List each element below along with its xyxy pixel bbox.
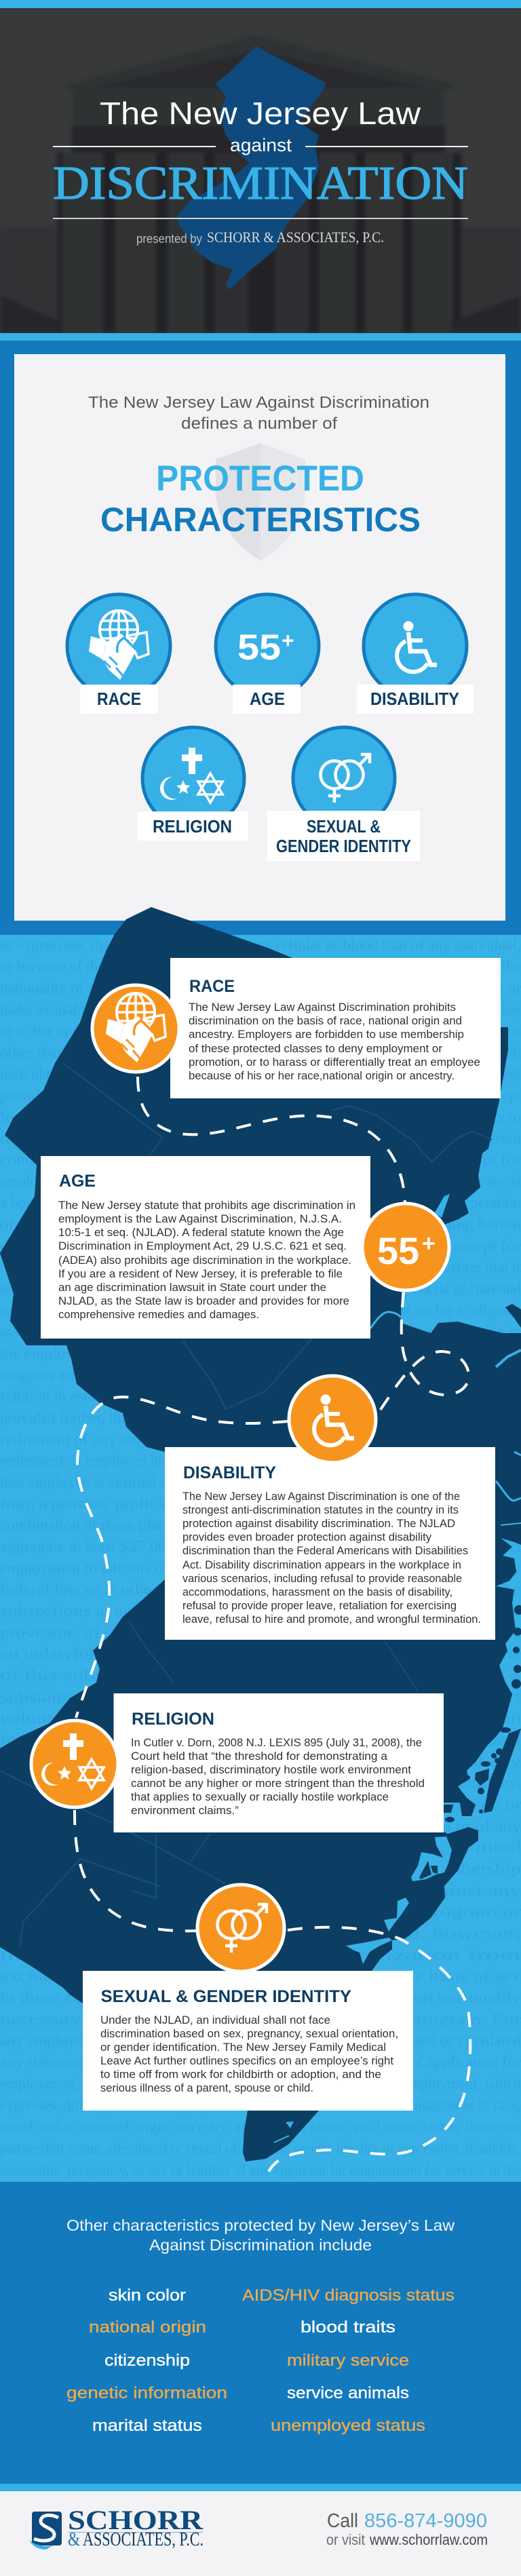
statute text pattern: to use club membership as a uniform qualification for employment, or for a religious <box>0 1302 521 1319</box>
card: disability: strongest anti-discrimination statutes in the country in its <box>182 1503 459 1516</box>
logo: SCHORR <box>68 2505 204 2535</box>
statute text pattern: subsections a. and b. of this section shall be read together with the <box>0 1602 521 1619</box>
list right column: service animals <box>287 2384 409 2402</box>
list left column <box>66 2286 227 2435</box>
statute text pattern: that employee is entitled to an immediate nonforfeitable annual retirement benefit <box>0 1474 521 1491</box>
list left column: citizenship <box>104 2351 190 2370</box>
list left column: genetic information <box>66 2384 227 2402</box>
badge: age <box>216 594 319 714</box>
statute text pattern: report for active duty in the armed forces; provided further that nothing herein <box>0 1130 521 1147</box>
statute text pattern: individual who served in the Armed Forces of the United <box>0 1839 521 1856</box>
card: age <box>41 1156 370 1339</box>
title: The New Jersey Law <box>100 96 421 131</box>
card: religion: environment claims.” <box>131 1804 239 1817</box>
panel: map background <box>0 935 521 2182</box>
New Jersey silhouette <box>176 46 326 290</box>
heading: protected characteristics: PROTECTED <box>156 459 364 499</box>
card: religion: religion-based, discriminatory hostile work environment <box>131 1763 411 1776</box>
statute text pattern: aggregate at least $27,000; and provided further that an employer may restrict <box>0 1538 521 1555</box>
list right column: military service <box>287 2351 409 2370</box>
statute text pattern: employment or to promote any person over 70 years of age; provided further that it <box>0 1258 521 1275</box>
badge: disability <box>357 594 474 714</box>
intro <box>66 2216 455 2254</box>
title: DISCRIMINATION <box>53 157 468 210</box>
contact <box>326 2510 488 2548</box>
card: sexual and gender identity: Under the NJLAD, an individual shall not face <box>100 2014 330 2026</box>
header section <box>0 0 521 341</box>
icon: age circle: + <box>422 1231 436 1256</box>
badge: disability: DISABILITY <box>370 689 459 709</box>
statute text pattern: any statement, advertisement or publication, or to use any form of application for <box>0 2054 521 2071</box>
card: race: ancestry. Employers are forbidden to use membership <box>189 1028 464 1041</box>
card: disability: The New Jersey Law Against Discrimination is one of the <box>182 1490 460 1503</box>
map: New Jersey <box>0 907 521 2161</box>
statute text pattern: of the particular business or enterprise; provided further that nothing herein <box>0 1216 521 1233</box>
card: race: RACE <box>189 977 235 996</box>
card: age: comprehensive remedies and damages. <box>58 1308 259 1321</box>
card: age: If you are a resident of New Jersey, it is preferable to file <box>58 1267 343 1280</box>
badge: age: 55 <box>237 628 281 668</box>
card: age: (ADEA) also prohibits age discrimination in the workplace. <box>58 1254 351 1267</box>
statute text pattern: States, or to refuse to hire or to deny full and equal membership <box>0 1860 521 1877</box>
statute text pattern: federal law or is otherwise necessary to protect the national interest. The <box>0 1581 521 1598</box>
card: religion: In Cutler v. Dorn, 2008 N.J. LEXIS 895 (July 31, 2008), the <box>131 1736 422 1749</box>
card: sexual and gender identity: discrimination based on sex, pregnancy, sexual orientation, <box>100 2027 398 2040</box>
list left column: skin color <box>109 2286 186 2305</box>
card: age: NJLAD, as the State law is broader and provides for more <box>58 1294 349 1307</box>
statute text pattern: other than age, from employment such individual or to discriminate against such <box>0 1044 521 1061</box>
card: age: The New Jersey statute that prohibits age discrimination in <box>58 1199 355 1212</box>
badge: age: AGE <box>250 689 285 709</box>
logo: ASSOCIATES, P.C. <box>83 2529 204 2550</box>
badge: religion: RELIGION <box>153 816 232 837</box>
statute text pattern: from a pension, profit sharing, savings or deferred retirement plan, or any <box>0 1495 521 1512</box>
card: disability: Act. Disability discrimination appears in the workplace in <box>182 1558 461 1571</box>
statute text pattern: or to limit the admission to, or employment in, any such program or <box>0 1796 521 1813</box>
statute text pattern: retirement of any employee who, for the two-year period immediately before <box>0 1431 521 1448</box>
statute text pattern: make available the results of a genetic test to an employer, to refuse to hire or employ <box>0 1001 521 1018</box>
icon: age circle: 55 <box>377 1229 419 1272</box>
statute text pattern: any employer or employment agency to print or cause to be printed or circulated <box>0 2032 521 2049</box>
statute text pattern: excluding from employment any person solely on the basis of sex <box>0 1967 521 1984</box>
card: age: AGE <box>59 1172 96 1191</box>
statute text pattern: necessary to the normal operation of the training program. For <box>0 2011 521 2028</box>
icon: disability circle <box>289 1376 376 1463</box>
intro: Against Discrimination include <box>149 2236 372 2254</box>
card: disability: provides even broader protection against disability <box>182 1531 431 1543</box>
badge: race: RACE <box>97 689 141 709</box>
card: race: The New Jersey Law Against Discrimination prohibits <box>189 1001 456 1014</box>
statute text pattern: contained shall be construed to bar an employer from refusing to accept for <box>0 1151 521 1168</box>
card: race: promotion, or to harass or differentially treat an employee <box>189 1056 480 1069</box>
card: disability: DISABILITY <box>183 1463 276 1482</box>
list right column: blood traits <box>301 2318 395 2337</box>
card: race: of these protected classes to deny employment or <box>189 1042 442 1055</box>
list right column: AIDS/HIV diagnosis status <box>242 2286 455 2305</box>
card: age: an age discrimination lawsuit in State court under the <box>58 1281 326 1294</box>
dashed route <box>75 1077 470 2174</box>
statute text pattern: on the job and related instruction; provided, however, <box>0 1925 521 1942</box>
card: sexual and gender identity: serious illness of a parent, spouse or child. <box>100 2081 313 2094</box>
card: disability: accommodations, harassment on the basis of disability, <box>182 1585 452 1598</box>
statute text pattern: religion in establishing and utilizing criteria for employment of an employee; and <box>0 1387 521 1404</box>
title <box>53 96 468 219</box>
intro text: The New Jersey Law Against Discrimination <box>88 393 429 412</box>
footer <box>29 2505 488 2550</box>
statute text pattern: individual, to exclude or to expel from its membership such individual any, <box>0 1774 521 1791</box>
badge: sexual and gender identity <box>267 727 420 861</box>
icon: religion circle <box>31 1720 118 1807</box>
intro text <box>88 393 429 433</box>
card: disability <box>165 1447 495 1640</box>
icon: age circle <box>362 1204 449 1290</box>
statute text pattern: to discriminate in compensation against members of the union or of any <box>0 1818 521 1834</box>
statute text pattern: of this subsection for an employer to act on the basis of a <box>0 1667 521 1684</box>
logo <box>29 2505 204 2550</box>
statute text pattern: or to otherwise discriminate by the employer against any <box>0 1882 521 1899</box>
courthouse photo <box>0 35 521 333</box>
statute text pattern: for employment an applicant who has received a notice of induction or orders to <box>0 1109 521 1126</box>
icon: race circle <box>92 985 179 1072</box>
statute text pattern: substantial business interest in its lawful operation and conduct <box>0 1689 521 1706</box>
statute text pattern: religious activities of the association or organization, or in following the tenets of its <box>0 1366 521 1383</box>
card: sexual and gender identity: Leave Act further outlines specifics on an employee’s right <box>100 2054 393 2067</box>
card: disability: discrimination than the Federal Americans with Disabilities <box>182 1544 468 1557</box>
card: race: discrimination on the basis of race, national origin and <box>189 1014 462 1027</box>
intro: Other characteristics protected by New Jersey’s Law <box>66 2216 455 2234</box>
card: disability: various scenarios, including refusal to provide reasonable <box>182 1572 462 1585</box>
statute text pattern: provided further, that it shall not be an unlawful employment practice to require the <box>0 1409 521 1426</box>
badge: sexual and gender identity: GENDER IDENTITY <box>276 836 411 856</box>
card: disability: refusal to provide proper leave, retaliation for exercising <box>182 1599 457 1612</box>
statute text pattern: nationality of any individual, or because of the refusal to submit to a genetic test or <box>0 980 521 997</box>
statute text pattern: for a labor organization, because of the race, creed, color, national <box>0 1731 521 1748</box>
statute text pattern: employment to citizens of the United States where such restriction is required by <box>0 1560 521 1577</box>
contact: Call <box>327 2510 358 2532</box>
badge: age: + <box>282 628 294 653</box>
card: age: 10:5-1 et seq. (NJLAD). A federal statute known the Age <box>58 1226 344 1239</box>
presented by: presented by <box>136 232 202 246</box>
intro text: defines a number of <box>181 415 337 433</box>
list left column: marital status <box>92 2417 202 2435</box>
panel: protected characteristics <box>0 341 521 935</box>
card: religion: cannot be any higher or more stringent than the threshold <box>131 1777 425 1790</box>
card: disability: protection against disability discrimination. The NJLAD <box>182 1517 455 1530</box>
statute text pattern: or because of the liability for service in the Armed Forces of the United States or the <box>0 958 521 975</box>
badge: race <box>67 594 170 714</box>
card: religion: that applies to sexually or racially hostile workplace <box>131 1790 389 1803</box>
statute text pattern: the employment of clergy, religious teachers or other employees engaged in the <box>0 1345 521 1362</box>
statute text pattern: association or organization to utilize religious affiliation as a uniform qualification in <box>0 1323 521 1340</box>
statute text pattern: an unlawful discrimination under the provisions of paragraph one <box>0 1645 521 1662</box>
statute text pattern: of its members in an apprenticeship or training program or <box>0 1903 521 1920</box>
card: race <box>170 958 501 1098</box>
icon: shield <box>216 443 305 560</box>
card: sexual and gender identity <box>83 1971 413 2111</box>
list left column: national origin <box>89 2318 206 2337</box>
contact: www.schorrlaw.com <box>369 2531 488 2548</box>
panel: other characteristics <box>0 2182 521 2484</box>
statute text pattern: contained shall be construed to bar an employer from refusing to accept for <box>0 1237 521 1254</box>
statute text pattern: combination of those plans, of the employer of that employee which equals in the <box>0 1516 521 1533</box>
card: religion: RELIGION <box>132 1710 214 1729</box>
list right column <box>242 2286 455 2435</box>
statute text pattern <box>0 936 521 2178</box>
statute text pattern: provisions of section 5 of this act and it shall not be considered to be <box>0 1624 521 1641</box>
statute text pattern: voluntary programs conducted by any employer or organization <box>0 1710 521 1727</box>
card: disability: leave, refusal to hire and promote, and wrongful termination. <box>182 1613 481 1626</box>
statute text pattern: a bona fide occupational qualification, reasonably necessary to the normal operation <box>0 1194 521 1211</box>
logo: & <box>68 2529 80 2550</box>
card: age: Discrimination in Employment Act, 29 U.S.C. 621 et seq. <box>58 1239 347 1252</box>
badge: sexual and gender identity: SEXUAL & <box>307 816 381 837</box>
statute text pattern: origin, ancestry, age, marital status, sexual orientation of any <box>0 1753 521 1770</box>
heading: protected characteristics <box>100 459 421 539</box>
card: sexual and gender identity: SEXUAL & GENDER IDENTITY <box>100 1987 351 2006</box>
card: religion: Court held that “the threshold for demonstrating a <box>131 1750 388 1763</box>
icon: gender circle <box>197 1885 284 1972</box>
statute text pattern: that nothing shall bar a labor organization from <box>0 1946 521 1963</box>
card: religion <box>114 1693 444 1832</box>
statute text pattern: creed, color, national origin, ancestry, age, marital status, civil union status, domestic <box>0 2118 521 2135</box>
presented by: SCHORR & ASSOCIATES, P.C. <box>207 229 384 246</box>
badge: religion <box>138 727 248 841</box>
statute text pattern: or expression, disability, atypical hereditary cellular or blood trait of any individual, <box>0 936 521 953</box>
statute text pattern: or to bar or to discharge or require to retire, unless justified by lawful considerations <box>0 1022 521 1039</box>
title: against <box>230 135 292 155</box>
heading: protected characteristics: CHARACTERISTICS <box>100 501 421 539</box>
card: sexual and gender identity: or gender identification. The New Jersey Family Medical <box>100 2041 386 2054</box>
statute text pattern: in those certain circumstances where it is a qualification reasonably <box>0 1989 521 2006</box>
contact: 856-874-9090 <box>364 2510 487 2532</box>
list right column: unemployed status <box>271 2417 425 2435</box>
card: age: employment is the Law Against Discrimination, N.J.S.A. <box>58 1212 342 1225</box>
card: sexual and gender identity: to time off from work for childbirth or adoption, and the <box>100 2068 381 2081</box>
presented by <box>136 229 384 246</box>
contact: or visit <box>326 2531 365 2548</box>
statute text pattern: retirement, is employed in a bona fide executive or a high policy-making position, if <box>0 1452 521 1469</box>
card: race: because of his or her race,national origin or ancestry. <box>189 1069 455 1082</box>
